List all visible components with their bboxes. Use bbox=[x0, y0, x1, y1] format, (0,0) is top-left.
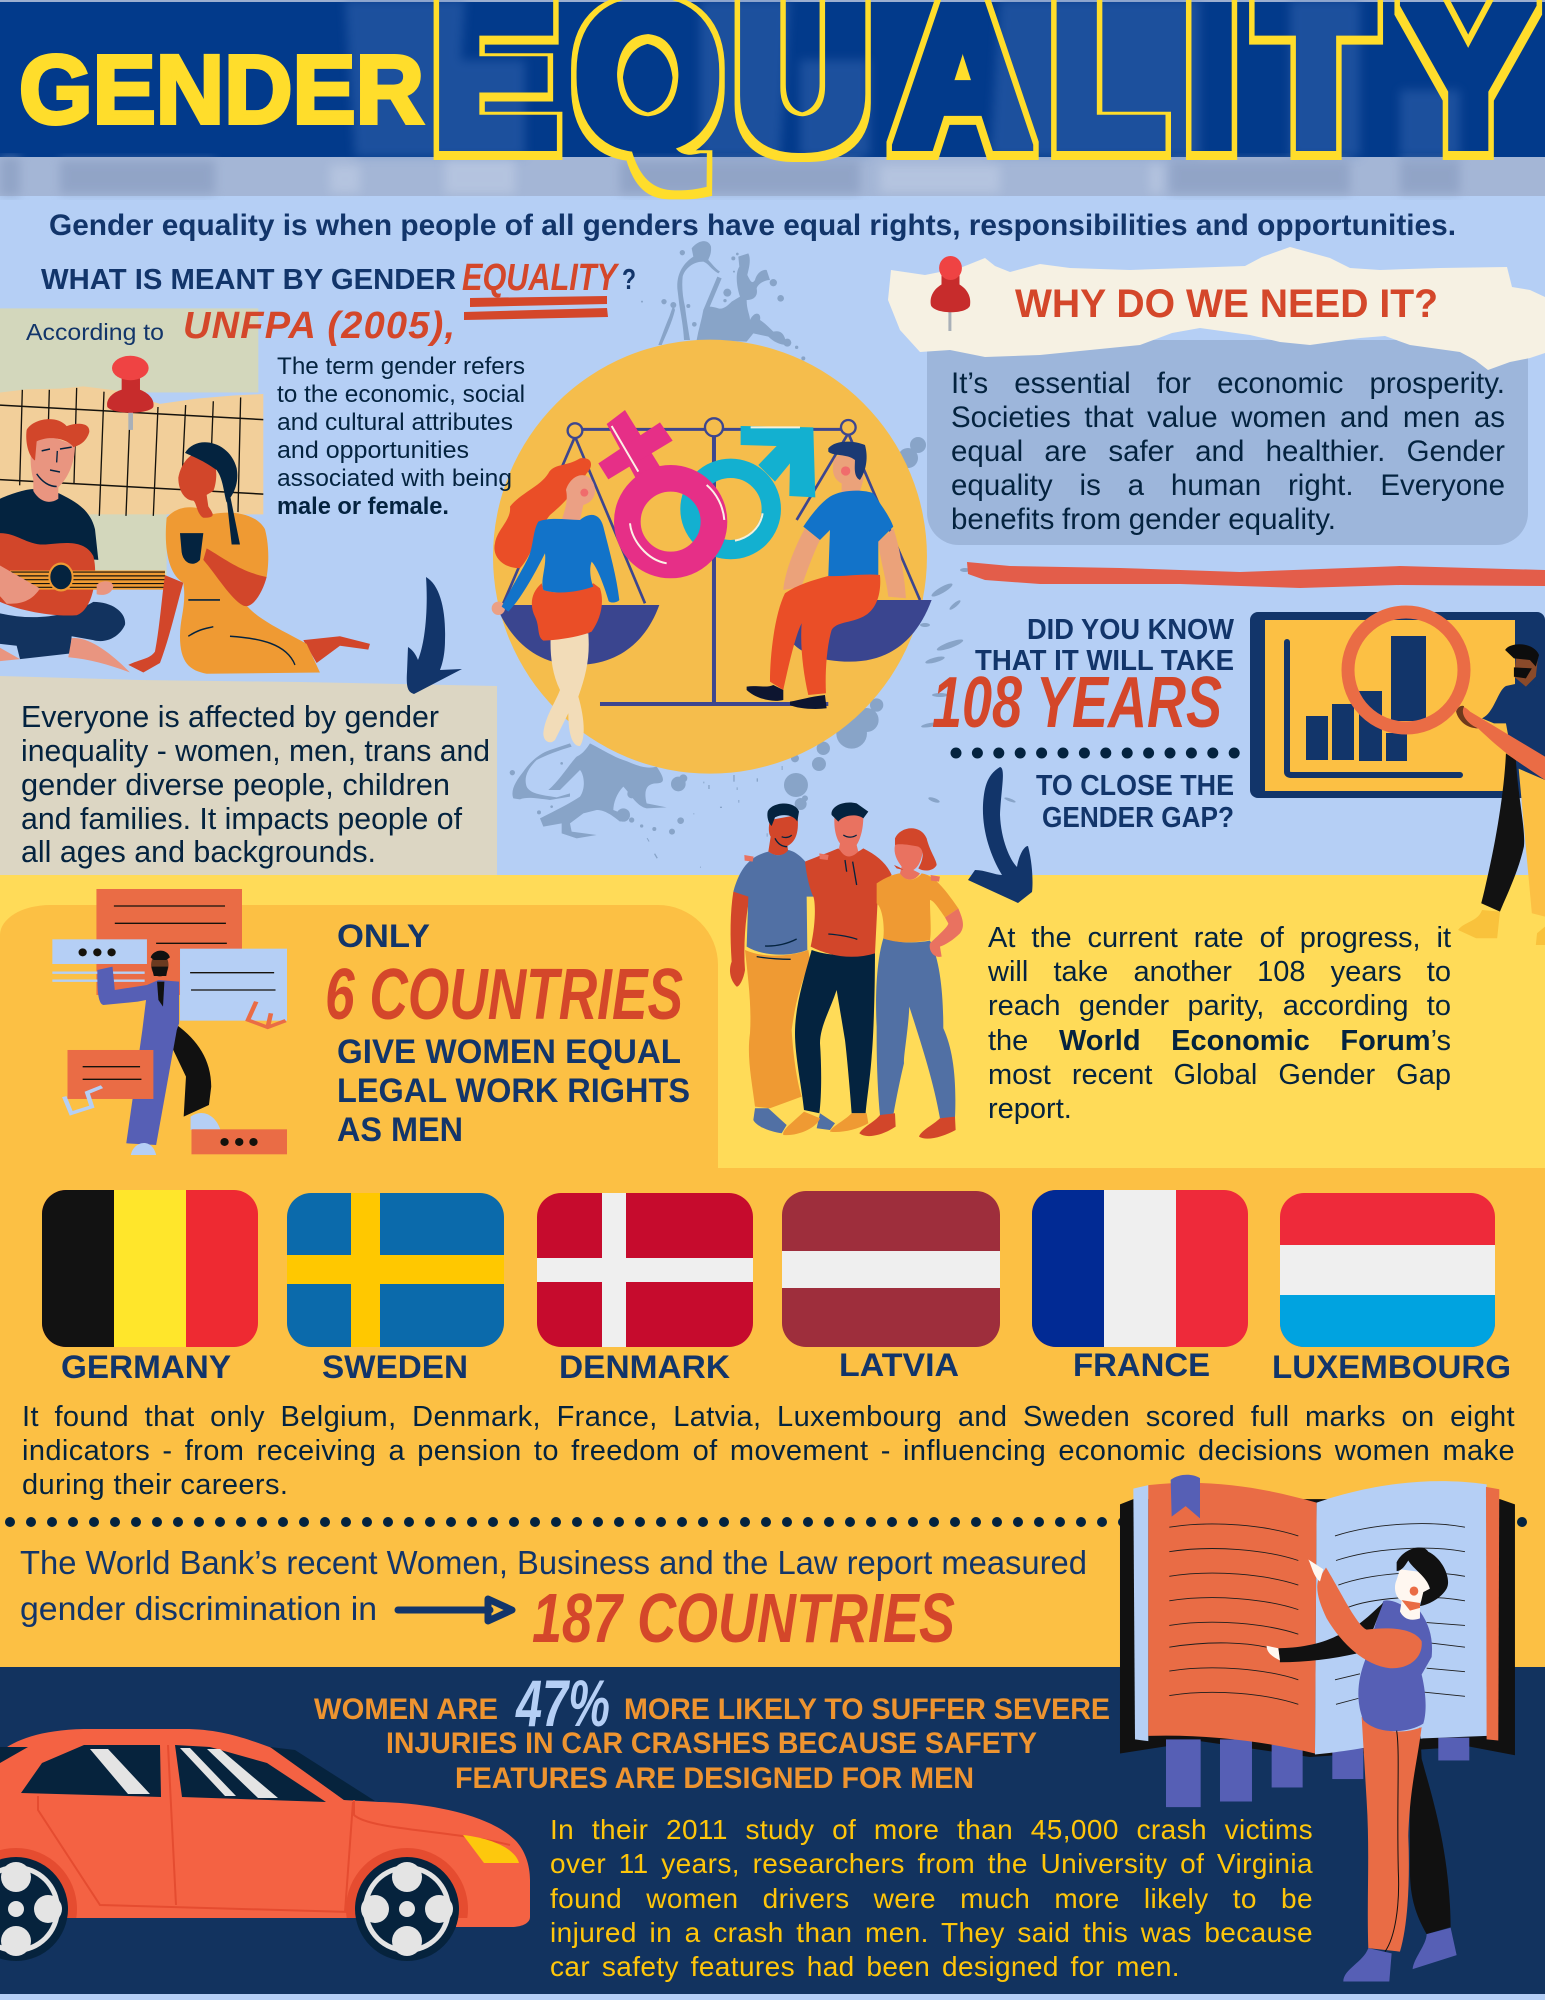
text: definition of gender: The term gender refers bbox=[277, 353, 525, 380]
heading: 47 percent car crashes: WOMEN ARE bbox=[314, 1693, 498, 1726]
title word GENDER: GENDER bbox=[19, 35, 424, 144]
illustration: man with magnifier bbox=[1456, 644, 1545, 945]
text block: world bank findings bbox=[22, 1401, 1515, 1501]
header banner bbox=[0, 0, 1545, 196]
text block: why gender equality matters bbox=[951, 367, 1505, 536]
heading: 47 percent car crashes: MORE LIKELY TO SUFFER SEVERE bbox=[624, 1693, 1110, 1726]
text: definition of gender: male or female. bbox=[277, 493, 449, 520]
big stat: 187 countries: 187 COUNTRIES bbox=[532, 1579, 955, 1657]
text: only 6 countries: GIVE WOMEN EQUAL bbox=[337, 1033, 681, 1071]
text block: car crash study: car safety features had been designed for men. bbox=[550, 1951, 1180, 1982]
flag: Denmark: DENMARK bbox=[559, 1349, 730, 1385]
text: definition of gender: and opportunities bbox=[277, 437, 469, 464]
flags row bbox=[42, 1190, 1511, 1385]
text block: world economic forum: reach gender parity, according to bbox=[988, 990, 1451, 1022]
text: only 6 countries bbox=[325, 918, 690, 1149]
flag: Luxembourg bbox=[1272, 1193, 1511, 1385]
panel: why do we need it: WHY DO WE NEED IT? bbox=[1015, 282, 1438, 326]
flag: Denmark bbox=[537, 1193, 753, 1385]
flag: Germany label with Belgian colours: GERMANY bbox=[61, 1349, 231, 1385]
ink splatter bottom bbox=[510, 698, 883, 868]
ink specks right of circle bbox=[898, 437, 1016, 804]
text: did you know 108 years: DID YOU KNOW bbox=[1027, 614, 1235, 646]
flag: Latvia bbox=[782, 1191, 1000, 1383]
arrow: curved down to body text bbox=[968, 767, 1033, 903]
heading: 47 percent car crashes: INJURIES IN CAR CRASHES BECAUSE SAFETY bbox=[386, 1727, 1037, 1760]
text block: world bank findings: during their careers. bbox=[22, 1469, 288, 1501]
text: only 6 countries: 6 COUNTRIES bbox=[325, 955, 683, 1035]
text block: why gender equality matters: equality is a human right. Everyone bbox=[951, 469, 1505, 502]
chart board with magnifying glass bbox=[1250, 612, 1545, 798]
text block: world bank findings: indicators - from receiving a pension to freedom of movement - influencing economic decisions women make bbox=[22, 1435, 1515, 1467]
text: according to UNFPA bbox=[26, 305, 455, 347]
text: world bank report bbox=[20, 1544, 1087, 1627]
text: according to UNFPA: According to bbox=[26, 319, 164, 345]
arrow: curved down left bbox=[407, 577, 462, 694]
text: only 6 countries: AS MEN bbox=[337, 1111, 463, 1149]
flag: Germany label with Belgian colours bbox=[42, 1190, 258, 1385]
big stat: 108 years: 108 YEARS bbox=[932, 663, 1222, 743]
decorative dotted divider bbox=[10, 1517, 1540, 1527]
flag: Sweden bbox=[287, 1193, 504, 1385]
text: did you know 108 years bbox=[975, 614, 1235, 677]
text block: why gender equality matters: It’s essential for economic prosperity. bbox=[951, 367, 1505, 400]
icon: magnifying glass ring bbox=[1348, 612, 1464, 728]
text block: world economic forum: At the current rate of progress, it bbox=[988, 922, 1451, 954]
text: according to UNFPA: UNFPA (2005), bbox=[183, 305, 455, 347]
bottom strip bbox=[0, 1994, 1545, 2000]
text: only 6 countries: ONLY bbox=[337, 918, 430, 954]
text block: why gender equality matters: Societies that value women and men as bbox=[951, 401, 1505, 434]
decorative dots bbox=[956, 748, 1236, 758]
heading: what is meant by gender equality: EQUALITY bbox=[462, 257, 620, 299]
heading: 47 percent car crashes: 47% bbox=[515, 1666, 610, 1740]
paper panel: everyone is affected: all ages and backgrounds. bbox=[21, 834, 376, 869]
heading: what is meant by gender equality: ? bbox=[622, 264, 636, 296]
heading: 47 percent car crashes bbox=[314, 1666, 1110, 1795]
text block: car crash study: In their 2011 study of more than 45,000 crash victims bbox=[550, 1814, 1313, 1845]
heading: what is meant by gender equality bbox=[41, 257, 636, 320]
text block: world bank findings: It found that only Belgium, Denmark, France, Latvia, Luxembourg and Sweden scored full marks on eight bbox=[22, 1401, 1515, 1433]
text block: world economic forum: most recent Global Gender Gap bbox=[988, 1059, 1451, 1091]
illustration: scales of gender equality bbox=[492, 340, 932, 774]
text: definition of gender: associated with being bbox=[277, 465, 512, 492]
arrow: to 187 countries bbox=[398, 1599, 512, 1621]
decorative red brush stroke bbox=[967, 562, 1545, 588]
intro statement: Gender equality is when people of all genders have equal rights, responsibilities and opportunities. bbox=[49, 209, 1456, 242]
flag: France: FRANCE bbox=[1073, 1347, 1210, 1383]
text: definition of gender: to the economic, social bbox=[277, 381, 525, 408]
text block: world economic forum bbox=[988, 922, 1451, 1125]
text: to close the gender gap bbox=[1036, 770, 1234, 834]
icon: red pin on couple panel bbox=[107, 356, 154, 430]
illustration: car bbox=[0, 1729, 530, 1970]
illustration: person reading giant book bbox=[1120, 1475, 1515, 1981]
text block: why gender equality matters: equal are safer and healthier. Gender bbox=[951, 435, 1505, 468]
paper panel: everyone is affected bbox=[0, 676, 497, 875]
text block: world economic forum: the World Economic Forum’s bbox=[988, 1025, 1451, 1057]
text: definition of gender: and cultural attributes bbox=[277, 409, 513, 436]
background bands bbox=[0, 875, 1545, 1994]
paper panel: everyone is affected: Everyone is affected by gender bbox=[21, 699, 439, 734]
flag: Latvia: LATVIA bbox=[839, 1347, 959, 1383]
text block: why gender equality matters: benefits from gender equality. bbox=[951, 503, 1336, 536]
text block: car crash study: injured in a crash than men. They said this was because bbox=[550, 1917, 1313, 1948]
flag: Sweden: SWEDEN bbox=[322, 1349, 468, 1385]
text: only 6 countries: LEGAL WORK RIGHTS bbox=[337, 1072, 690, 1110]
heading: 47 percent car crashes: FEATURES ARE DESIGNED FOR MEN bbox=[455, 1762, 974, 1795]
text: did you know 108 years: THAT IT WILL TAKE bbox=[975, 645, 1234, 677]
ink splatter top bbox=[641, 241, 805, 360]
flag: France bbox=[1032, 1190, 1248, 1383]
illustration: three friends bbox=[730, 802, 963, 1139]
paper panel: everyone is affected: gender diverse people, children bbox=[21, 767, 450, 802]
illustration panel: couple with guitar bbox=[0, 308, 370, 674]
text: to close the gender gap: GENDER GAP? bbox=[1042, 802, 1234, 834]
text block: world economic forum: will take another 108 years to bbox=[988, 956, 1451, 988]
text: world bank report: gender discrimination in bbox=[20, 1590, 377, 1627]
panel: why do we need it bbox=[888, 247, 1545, 545]
text block: car crash study bbox=[550, 1814, 1313, 1982]
text block: world economic forum: report. bbox=[988, 1093, 1072, 1125]
text: world bank report: The World Bank’s recent Women, Business and the Law report measured bbox=[20, 1544, 1087, 1581]
text: definition of gender bbox=[277, 353, 525, 520]
text block: car crash study: over 11 years, researchers from the University of Virginia bbox=[550, 1848, 1313, 1879]
paper panel: everyone is affected: inequality - women, men, trans and bbox=[21, 733, 490, 768]
text block: car crash study: found women drivers were much more likely to be bbox=[550, 1883, 1313, 1914]
paper panel: everyone is affected: and families. It impacts people of bbox=[21, 801, 462, 836]
text: to close the gender gap: TO CLOSE THE bbox=[1036, 770, 1234, 802]
illustration: man with documents bbox=[52, 889, 287, 1155]
heading: what is meant by gender equality: WHAT IS MEANT BY GENDER bbox=[41, 264, 456, 296]
flag: Luxembourg: LUXEMBOURG bbox=[1272, 1349, 1511, 1385]
